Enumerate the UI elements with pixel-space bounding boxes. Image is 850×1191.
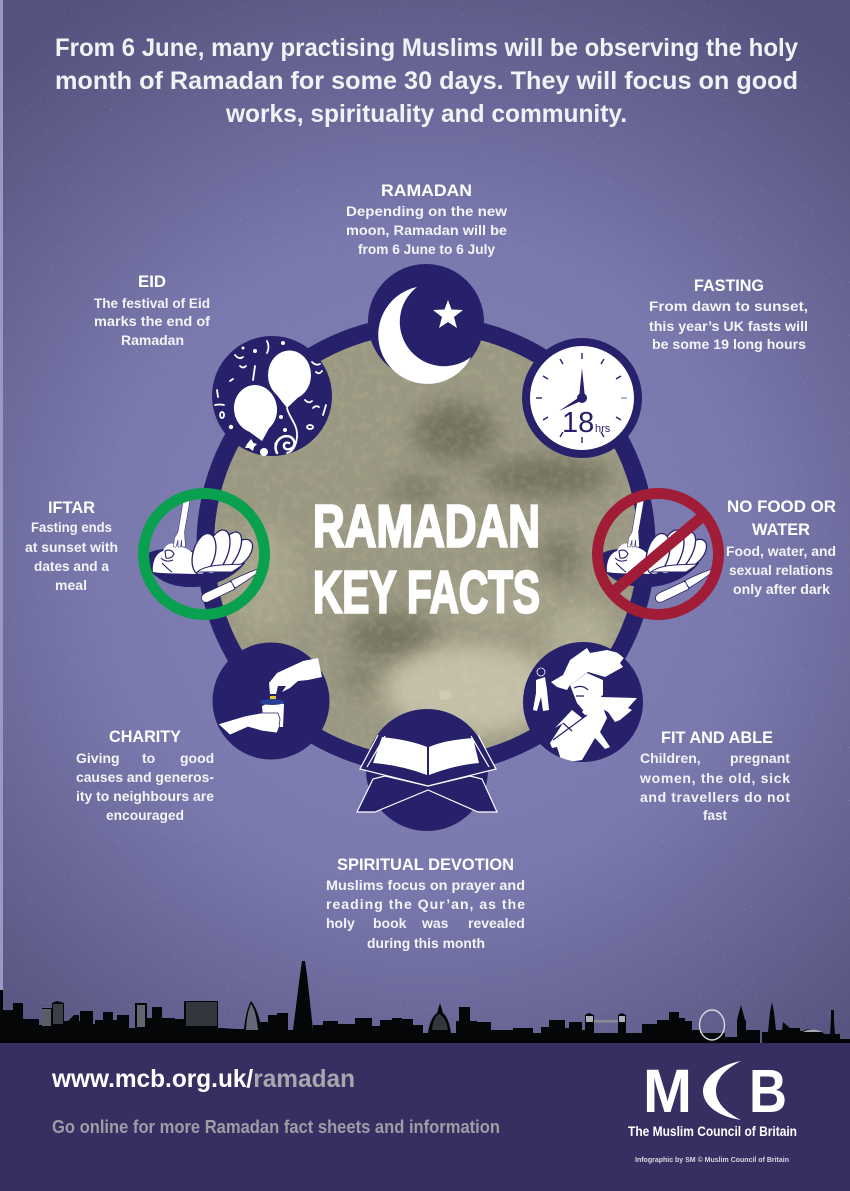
text block: ramadan: Depending on the new [346,203,507,219]
text block: spiritual devotion: book [373,915,407,931]
text block: fit and able: fast [703,807,727,823]
text block: charity: good [180,750,214,766]
icon: unwell person with tissue (fit and able) [523,642,643,763]
main title: RAMADAN [313,494,540,560]
text block: no food or water: sexual relations [729,562,833,578]
footer strapline: Go online for more Ramadan fact sheets and information [52,1117,500,1137]
main title [313,494,540,626]
text block: no food or water: only after dark [733,581,830,597]
text block: fit and able [639,728,790,823]
text block: spiritual devotion: during this month [367,935,485,951]
text block: iftar [25,498,118,593]
text block: fit and able: women, the old, sick [639,770,790,786]
intro heading: month of Ramadan for some 30 days. They will focus on good [55,67,798,95]
text block: eid: EID [138,272,166,291]
text block: iftar: meal [55,577,87,593]
text block: charity: ity to neighbours are [76,788,214,804]
text block: no food or water: Food, water, and [726,543,836,559]
text block: spiritual devotion: SPIRITUAL DEVOTION [337,855,514,874]
text block: charity: Giving [76,750,120,766]
text block: fit and able: Children, [640,750,701,766]
MCB logo: B [749,1057,787,1125]
icon: clock showing 18 hours [522,338,642,458]
text block: spiritual devotion: revealed [468,915,525,931]
text block: spiritual devotion: Muslims focus on prayer and [326,877,525,893]
text block: ramadan: from 6 June to 6 July [358,241,495,257]
text block: charity: CHARITY [109,727,182,746]
main title: KEY FACTS [313,560,540,626]
text block: fasting: this year’s UK fasts will [649,318,808,334]
icon: food plate in green circle (iftar) [143,494,264,614]
text block: fasting: be some 19 long hours [652,336,806,352]
text block: no food or water: NO FOOD OR [727,497,836,516]
text block: fasting: FASTING [694,276,764,295]
credit line: Infographic by SM © Muslim Council of Britain [635,1155,789,1164]
icon: balloons and confetti [212,336,332,456]
icon: crossed-out food plate (no food or water) [597,494,718,614]
text block: charity [76,727,214,823]
text block: eid: The festival of Eid [94,295,210,311]
icon: open Qur'an on a stand [357,709,497,831]
icon: clock showing 18 hours: hrs [595,423,611,435]
intro heading [55,34,798,128]
text block: no food or water [726,497,836,597]
intro heading: works, spirituality and community. [225,100,627,128]
icon: crescent and star [368,264,484,384]
text block: spiritual devotion [326,855,525,951]
footer band [0,1043,850,1191]
text block: iftar: dates and a [34,558,109,574]
text block: ramadan: moon, Ramadan will be [346,222,507,238]
text block: spiritual devotion: holy [326,915,355,931]
text block: charity: encouraged [106,807,184,823]
text block: fit and able: pregnant [730,750,790,766]
moon with ring [207,326,645,764]
website link: www.mcb.org.uk/ramadan [51,1065,355,1093]
MCB logo: The Muslim Council of Britain [628,1123,797,1139]
text block: fit and able: and travellers do not [640,789,790,805]
MCB logo [628,1057,797,1139]
text block: fit and able: FIT AND ABLE [661,728,773,747]
text block: iftar: IFTAR [48,498,95,517]
text block: charity: to [142,750,155,766]
intro heading: From 6 June, many practising Muslims will be observing the holy [55,34,798,62]
text block: ramadan: RAMADAN [381,181,472,200]
text block: iftar: Fasting ends [31,519,112,535]
icon: clock showing 18 hours: 18 [562,407,594,439]
text block: ramadan [346,181,507,257]
text block: iftar: at sunset with [25,539,118,555]
MCB logo: M [643,1057,692,1125]
text block: eid: marks the end of [94,313,210,329]
text block: spiritual devotion: was [421,915,449,931]
text block: spiritual devotion: reading the Qur’an, as the [326,896,525,912]
text block: charity: causes and generos- [76,769,214,785]
London skyline silhouette [0,961,850,1044]
text block: fasting [649,276,808,352]
text block: no food or water: WATER [752,520,810,539]
text block: eid: Ramadan [121,332,184,348]
text block: eid [94,272,210,348]
text block: fasting: From dawn to sunset, [649,298,808,314]
icon: hands giving to a charity cup [212,642,330,760]
